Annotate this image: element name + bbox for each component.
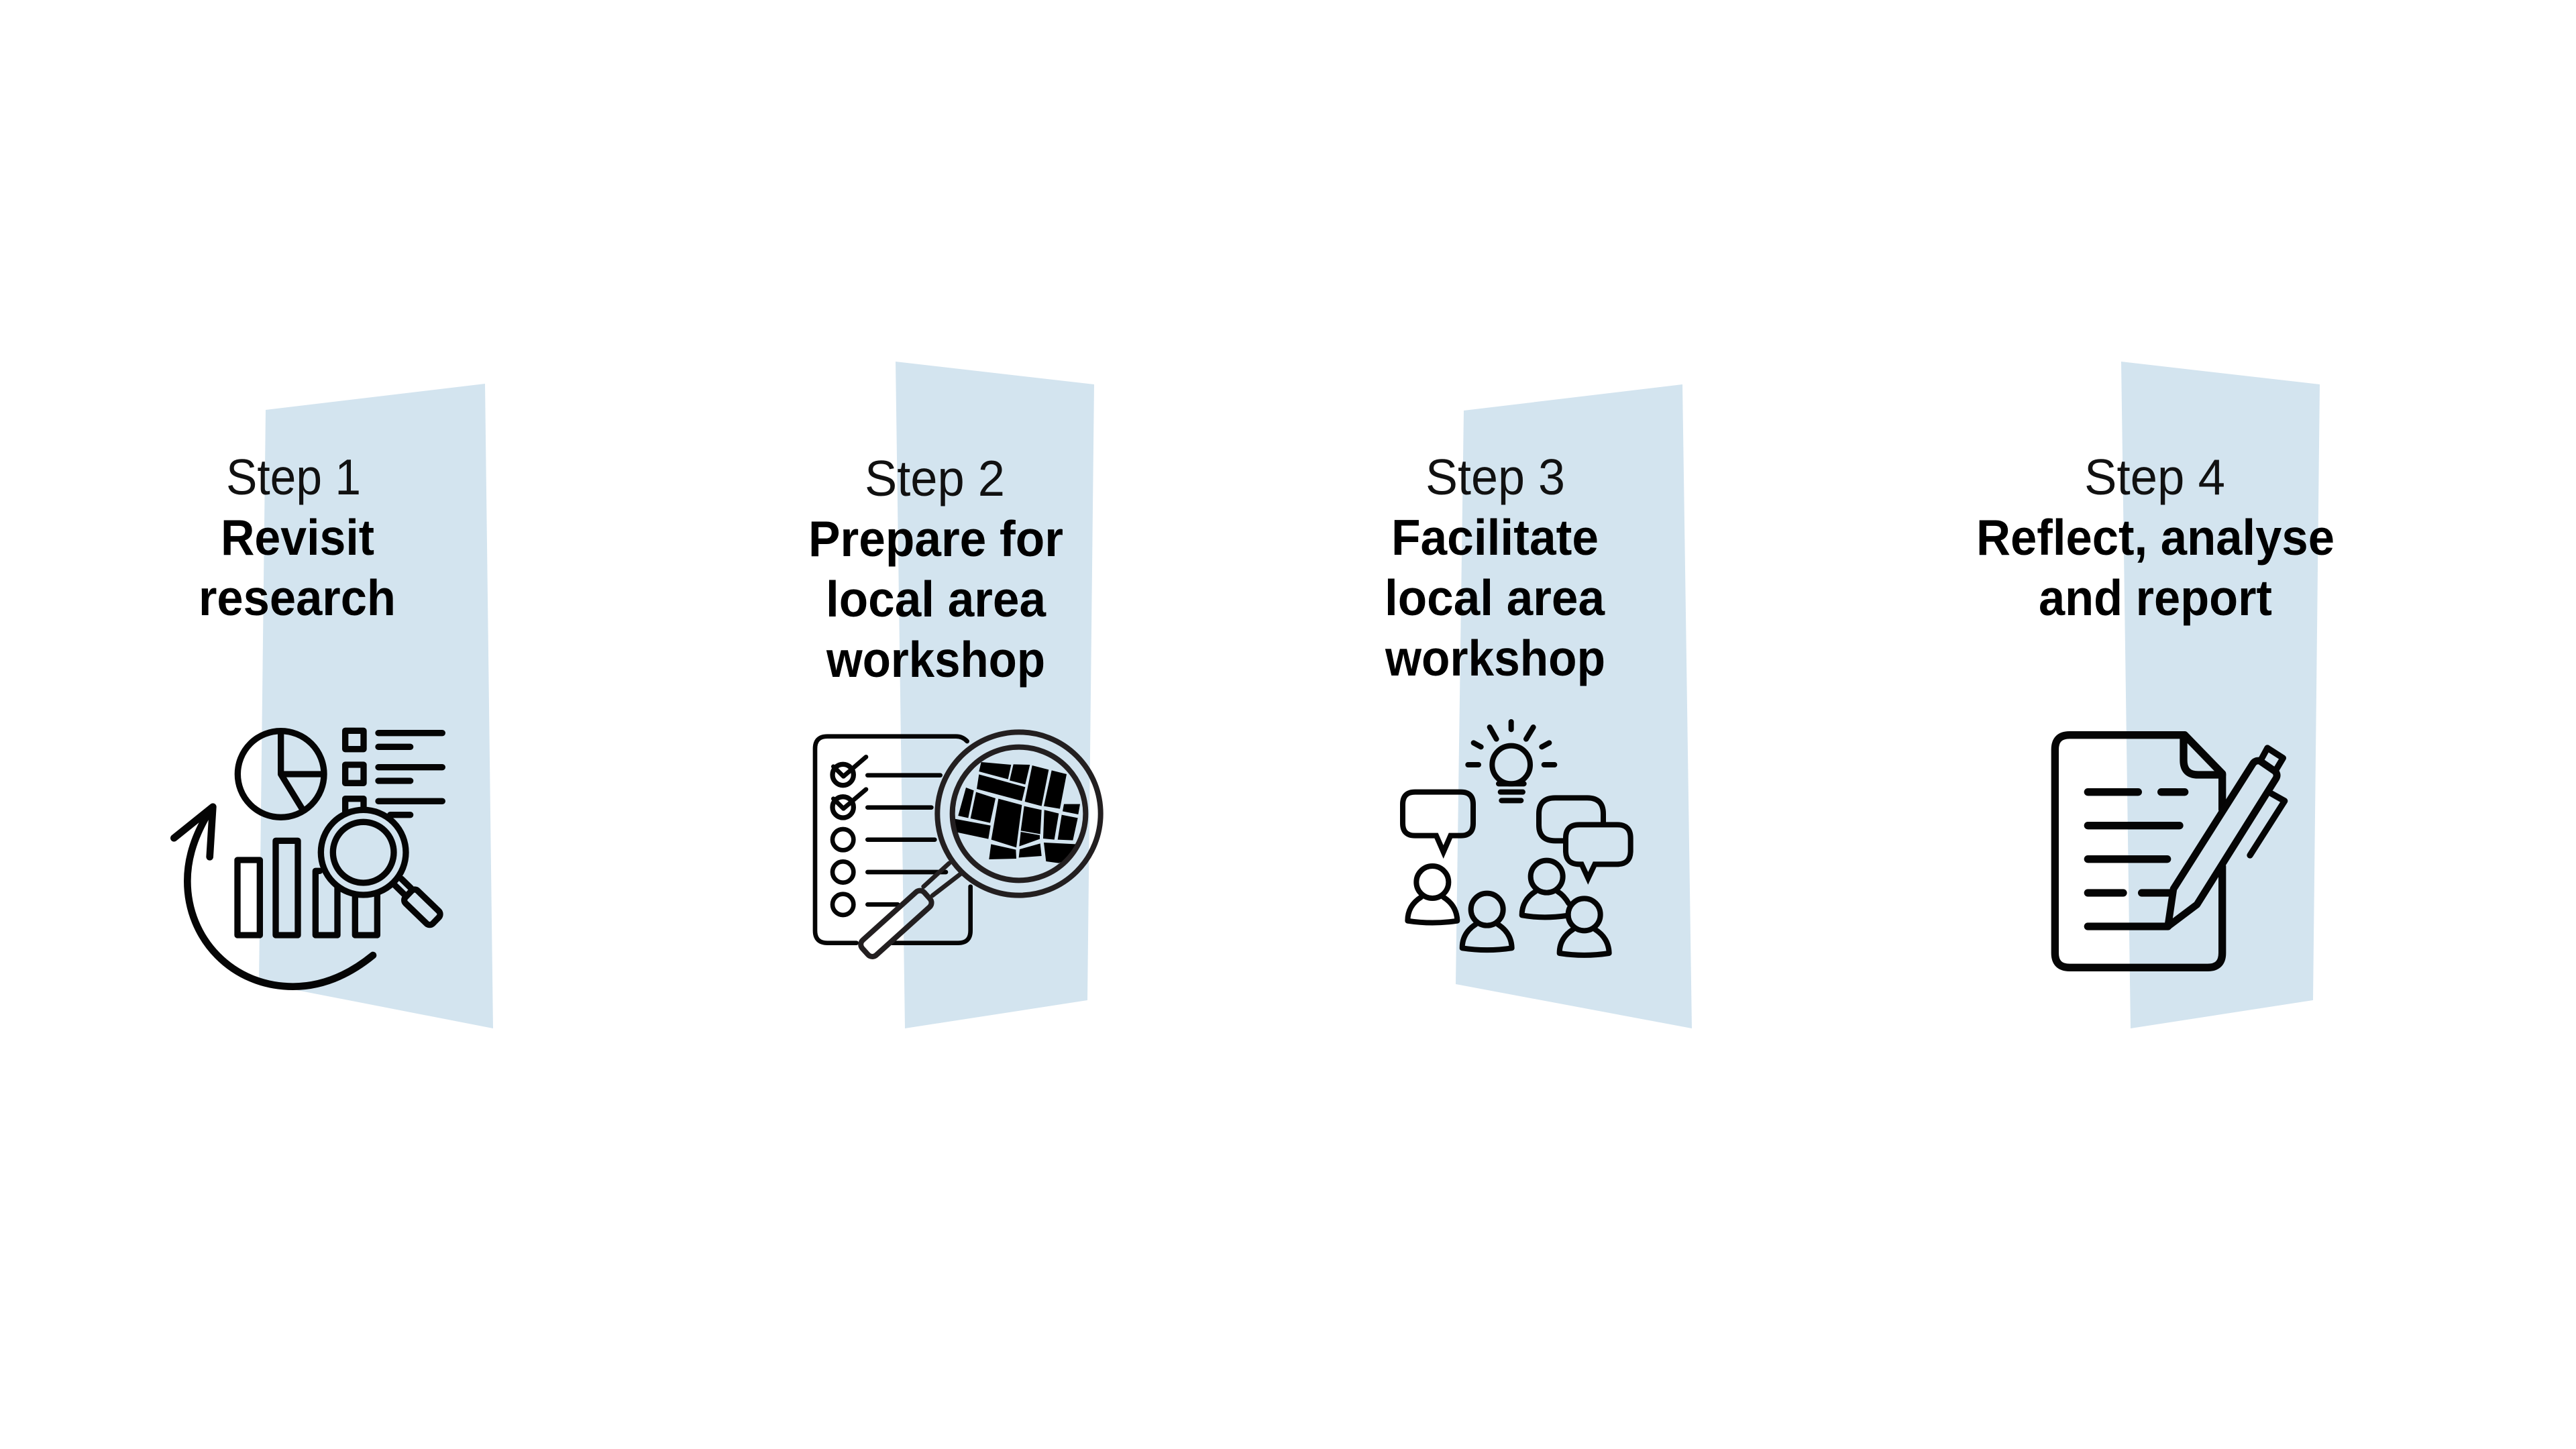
text: step 4 heading: Reflect, analyse <box>1976 509 2334 566</box>
panel: step 1 background <box>259 384 493 1028</box>
panel: step 4 background <box>2121 362 2320 1028</box>
icon: checklist with magnifier over map <box>815 732 1101 959</box>
text: step 1 heading <box>199 449 396 626</box>
icon: people talking with lightbulb <box>1403 722 1631 955</box>
text: step 4 heading: and report <box>2039 570 2272 626</box>
text: step 3 heading: local area <box>1385 570 1605 626</box>
map blocks inside lens <box>955 762 1080 863</box>
step 3 column <box>1385 384 1692 1028</box>
step 2 column <box>808 362 1101 1028</box>
step 1 column <box>174 384 493 1028</box>
text: step 2 heading: Prepare for <box>808 511 1063 567</box>
text: step 2 heading: workshop <box>826 631 1045 688</box>
icon: document and pen <box>2055 735 2285 967</box>
text: step 3 heading: workshop <box>1385 630 1605 686</box>
text: step 4 heading <box>1976 449 2334 626</box>
text: step 1 heading: Step 1 <box>226 449 361 505</box>
panel: step 2 background <box>896 362 1094 1028</box>
text: step 2 heading <box>808 450 1063 688</box>
text: step 2 heading: Step 2 <box>865 450 1005 506</box>
panel: step 3 background <box>1456 384 1692 1028</box>
text: step 3 heading <box>1385 449 1605 686</box>
text: step 2 heading: local area <box>826 571 1046 627</box>
text: step 3 heading: Step 3 <box>1426 449 1565 505</box>
icon: charts, magnifier and return arrow <box>174 731 442 987</box>
text: step 1 heading: research <box>199 570 396 626</box>
text: step 4 heading: Step 4 <box>2084 449 2225 505</box>
text: step 3 heading: Facilitate <box>1391 509 1599 566</box>
step 4 column <box>1976 362 2334 1028</box>
text: step 1 heading: Revisit <box>221 509 374 566</box>
